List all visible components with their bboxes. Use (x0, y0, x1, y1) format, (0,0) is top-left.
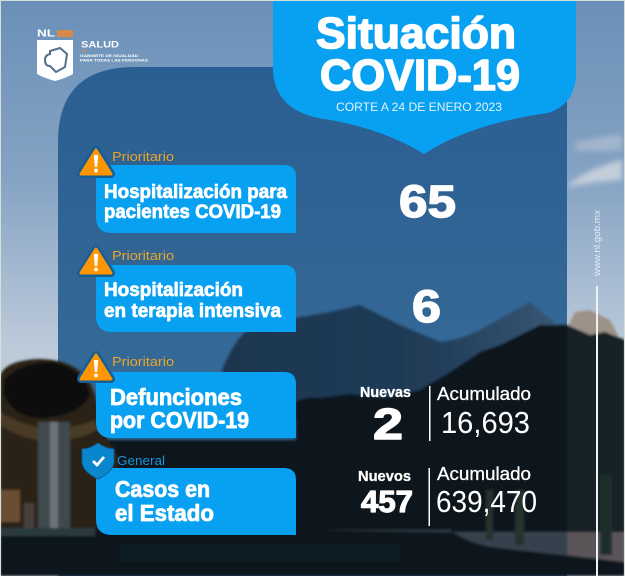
value: 65: 65 (399, 176, 456, 227)
card: defunciones (96, 372, 296, 438)
stats: defunciones: Acumulado (437, 384, 531, 404)
stats: defunciones (360, 384, 531, 449)
card: casos: Casos en (115, 476, 210, 502)
card: defunciones: Defunciones (110, 384, 242, 410)
logo: NL Salud: NL (37, 28, 56, 40)
subtitle: date: CORTE A 24 DE ENERO 2023 (336, 102, 502, 114)
icon: warning 2 (81, 249, 111, 273)
stats: casos: Nuevos (358, 468, 411, 485)
card: casos (96, 468, 296, 535)
stats: defunciones: 16,693 (441, 405, 530, 440)
logo: NL Salud (37, 28, 149, 81)
card: hospitalización COVID-19: pacientes COVID-19 (104, 202, 281, 223)
stats: casos: 457 (361, 484, 413, 519)
icon: warning 1 (81, 150, 111, 174)
card: hospitalización COVID-19: Hospitalización para (104, 182, 287, 203)
title: COVID-19: COVID-19 (320, 51, 520, 100)
card: defunciones: por COVID-19 (110, 407, 249, 433)
label: general: General (117, 453, 165, 468)
website vertical label: www.nl.gob.mx (592, 209, 602, 277)
stats: defunciones: 2 (373, 400, 403, 449)
stats: casos (358, 464, 537, 526)
panel: dark blue overlay (58, 67, 567, 576)
stats: casos: 639,470 (436, 484, 537, 519)
label: prioritario 1: Prioritario (112, 149, 174, 164)
label: prioritario 2: Prioritario (112, 248, 174, 263)
stats: defunciones: Nuevas (360, 384, 411, 401)
icon: warning 3 (81, 355, 111, 379)
card: hospitalización COVID-19 (96, 165, 296, 233)
card: terapia intensiva (96, 265, 296, 332)
card: terapia intensiva: Hospitalización (104, 280, 243, 301)
card: casos: el Estado (115, 500, 214, 526)
value: 6: 6 (412, 281, 441, 332)
card: terapia intensiva: en terapia intensiva (104, 301, 281, 322)
logo: NL Salud: GABINETE DE IGUALDAD (80, 54, 139, 58)
photo: landscape (0, 302, 625, 576)
icon: shield check (82, 443, 114, 479)
logo: NL Salud: SALUD (81, 40, 120, 50)
title: Situación: Situación (316, 9, 516, 58)
stats: casos: Acumulado (437, 464, 531, 484)
label: prioritario 3: Prioritario (112, 354, 174, 369)
title banner (273, 1, 576, 154)
logo: NL Salud: PARA TODAS LAS PERSONAS (80, 58, 149, 62)
